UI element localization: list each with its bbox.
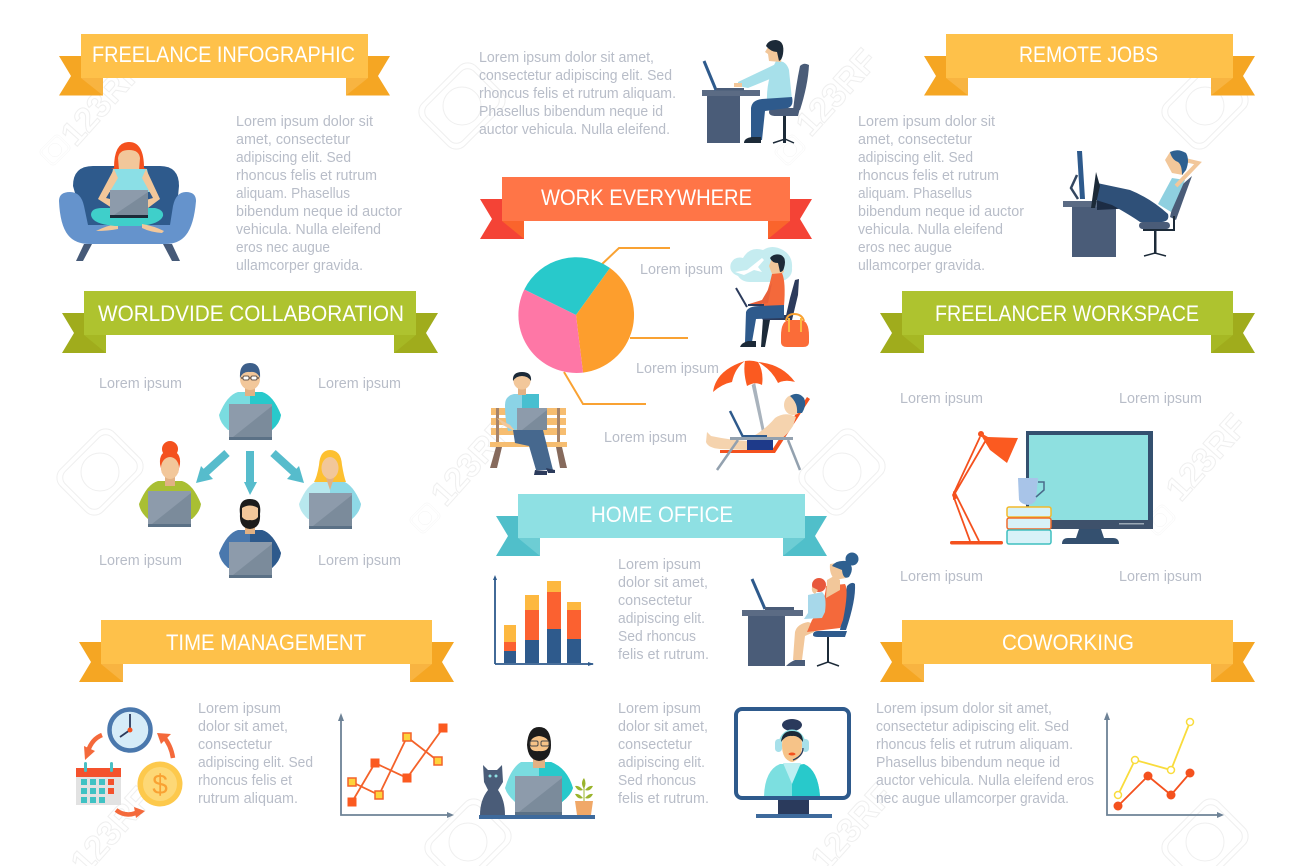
- text block: freelance infographic: adipiscing elit. Sed: [236, 150, 351, 166]
- text block: home office: consectetur: [618, 593, 692, 609]
- watermark: 123RF: [789, 42, 885, 143]
- labels: workspace: Lorem ipsum: [900, 569, 983, 585]
- text block: coworking: auctor vehicula. Nulla eleifend eros: [876, 773, 1094, 789]
- arrow: coin to clock: [157, 733, 173, 758]
- text block: time management: adipiscing elit. Sed: [198, 755, 313, 771]
- banner: freelance infographic: FREELANCE INFOGRAPHIC: [92, 42, 355, 67]
- text block: remote jobs: Lorem ipsum dolor sit: [858, 114, 995, 130]
- text block: freelance infographic: bibendum neque id auctor: [236, 204, 402, 220]
- labels: pie chart: Lorem ipsum: [636, 361, 719, 377]
- text block: remote jobs: eros nec augue: [858, 240, 952, 256]
- arrow: calendar to coin: [116, 807, 145, 818]
- text block: home office: felis et rutrum.: [618, 647, 709, 663]
- text block: lower centre: dolor sit amet,: [618, 719, 708, 735]
- text block: freelance infographic: eros nec augue: [236, 240, 330, 256]
- text block: remote jobs: amet, consectetur: [858, 132, 972, 148]
- text block: home office: Sed rhoncus: [618, 629, 696, 645]
- line chart: circles: [1104, 712, 1224, 818]
- icon: beach lounger and umbrella: [706, 361, 810, 470]
- icon: man dreaming of travel: [730, 247, 809, 347]
- labels: pie chart: Lorem ipsum: [640, 262, 723, 278]
- labels: collaboration: Lorem ipsum: [318, 553, 401, 569]
- icon: workspace with lamp, books and monitor: [950, 431, 1153, 544]
- banner: time management: [79, 620, 454, 682]
- text block: home office: dolor sit amet,: [618, 575, 708, 591]
- text block: home office: [618, 557, 709, 663]
- person: left, woman with bun: [139, 441, 201, 527]
- banner: time management: TIME MANAGEMENT: [166, 630, 366, 655]
- text block: lower centre: Lorem ipsum: [618, 701, 701, 717]
- text block: time management: dolor sit amet,: [198, 719, 288, 735]
- watermark: 123RF: [424, 412, 520, 513]
- text block: freelance infographic: vehicula. Nulla eleifend: [236, 222, 381, 238]
- icon: backpack: [781, 314, 809, 347]
- text block: freelance infographic: Lorem ipsum dolor sit: [236, 114, 373, 130]
- line chart: squares: [338, 713, 454, 818]
- text block: coworking: [876, 701, 1094, 807]
- labels: collaboration: Lorem ipsum: [318, 376, 401, 392]
- text block: home office: Lorem ipsum: [618, 557, 701, 573]
- banner: remote jobs: [924, 34, 1255, 96]
- text block: coworking: Phasellus bibendum neque id: [876, 755, 1060, 771]
- text block: remote jobs: adipiscing elit. Sed: [858, 150, 973, 166]
- text block: time management: rutrum aliquam.: [198, 791, 298, 807]
- labels: workspace: Lorem ipsum: [900, 391, 983, 407]
- banner: worldwide collaboration: WORLDVIDE COLLABORATION: [98, 301, 404, 326]
- icon: calendar: [76, 762, 121, 805]
- icon: plant: [575, 778, 593, 815]
- text block: freelance infographic: [236, 114, 402, 274]
- banner: freelancer workspace: FREELANCER WORKSPACE: [935, 301, 1199, 326]
- banner: work everywhere: WORK EVERYWHERE: [541, 185, 752, 210]
- text block: lower centre: Sed rhoncus: [618, 773, 696, 789]
- banner: worldwide collaboration: [62, 291, 438, 353]
- diagram: collaboration network: [139, 363, 361, 578]
- text block: time management: consectetur: [198, 737, 272, 753]
- labels: collaboration: Lorem ipsum: [99, 376, 182, 392]
- pie callout lines: [564, 248, 688, 404]
- text block: remote jobs: aliquam. Phasellus: [858, 186, 972, 202]
- person: bottom, bearded man: [219, 499, 281, 578]
- banner: coworking: [880, 620, 1255, 682]
- text block: freelance infographic: aliquam. Phasellus: [236, 186, 350, 202]
- icon: time, money cycle: [76, 710, 182, 818]
- text block: remote jobs: rhoncus felis et rutrum: [858, 168, 999, 184]
- stacked bar chart: [493, 575, 594, 666]
- text block: lower centre: [618, 701, 709, 807]
- icon: coin: $: [152, 769, 168, 800]
- text block: freelance infographic: amet, consectetur: [236, 132, 350, 148]
- text block: lower centre: felis et rutrum.: [618, 791, 709, 807]
- text block: top centre: auctor vehicula. Nulla eleifend.: [479, 122, 670, 138]
- arrow: clock to calendar: [84, 735, 102, 760]
- icon: man on bench: [490, 372, 567, 475]
- banner: freelancer workspace: [880, 291, 1255, 353]
- labels: workspace: [900, 391, 1202, 585]
- labels: collaboration: Lorem ipsum: [99, 553, 182, 569]
- icon: books: [1007, 507, 1051, 544]
- icon: plane: [735, 258, 764, 275]
- text block: top centre: consectetur adipiscing elit. Sed: [479, 68, 672, 84]
- text block: time management: [198, 701, 313, 807]
- text block: freelance infographic: rhoncus felis et rutrum: [236, 168, 377, 184]
- icon: man relaxing with feet on desk: [1063, 150, 1198, 257]
- text block: top centre: Phasellus bibendum neque id: [479, 104, 663, 120]
- text block: lower centre: adipiscing elit.: [618, 755, 705, 771]
- text block: lower centre: consectetur: [618, 737, 692, 753]
- icon: mother with child at desk: [742, 552, 858, 666]
- labels: workspace: Lorem ipsum: [1119, 391, 1202, 407]
- text block: time management: rhoncus felis et: [198, 773, 292, 789]
- banner: coworking: COWORKING: [1002, 630, 1134, 655]
- arrow: to bottom: [244, 451, 257, 495]
- person: top with glasses: [219, 363, 281, 440]
- pie chart: [518, 248, 688, 404]
- text block: remote jobs: vehicula. Nulla eleifend: [858, 222, 1003, 238]
- banner: freelance infographic: [59, 34, 390, 96]
- labels: workspace: Lorem ipsum: [1119, 569, 1202, 585]
- text block: top centre: rhoncus felis et rutrum aliquam.: [479, 86, 676, 102]
- icon: bearded man with cat and plant: [479, 727, 595, 819]
- text block: coworking: Lorem ipsum dolor sit amet,: [876, 701, 1052, 717]
- arrow: to right: [273, 453, 304, 483]
- text block: top centre: Lorem ipsum dolor sit amet,: [479, 50, 654, 66]
- text block: remote jobs: [858, 114, 1024, 274]
- text block: freelance infographic: ullamcorper gravida.: [236, 258, 363, 274]
- labels: pie chart: Lorem ipsum: [604, 430, 687, 446]
- person: right, blonde woman: [299, 450, 361, 529]
- watermark: 123RF: [54, 52, 150, 153]
- banner: work everywhere: [480, 177, 812, 239]
- banner: home office: [496, 494, 827, 556]
- banner: remote jobs: REMOTE JOBS: [1019, 42, 1158, 67]
- text block: remote jobs: bibendum neque id auctor: [858, 204, 1024, 220]
- text block: remote jobs: ullamcorper gravida.: [858, 258, 985, 274]
- labels: collaboration: [99, 376, 401, 569]
- icon: man working at desk: [702, 40, 809, 143]
- icon: cup: [1018, 478, 1044, 505]
- text block: coworking: nec augue ullamcorper gravida.: [876, 791, 1069, 807]
- text block: coworking: rhoncus felis et rutrum aliquam.: [876, 737, 1073, 753]
- watermark: 123RF: [1159, 407, 1255, 508]
- arrow: to left: [196, 453, 227, 483]
- text block: home office: adipiscing elit.: [618, 611, 705, 627]
- icon: cat: [480, 765, 505, 815]
- icon: video call monitor: [736, 709, 849, 818]
- labels: pie chart: [604, 262, 723, 446]
- banner: home office: HOME OFFICE: [591, 502, 733, 527]
- text block: coworking: consectetur adipiscing elit. Sed: [876, 719, 1069, 735]
- text block: top centre: [479, 50, 676, 138]
- text block: time management: Lorem ipsum: [198, 701, 281, 717]
- icon: woman on sofa with laptop: [59, 142, 196, 261]
